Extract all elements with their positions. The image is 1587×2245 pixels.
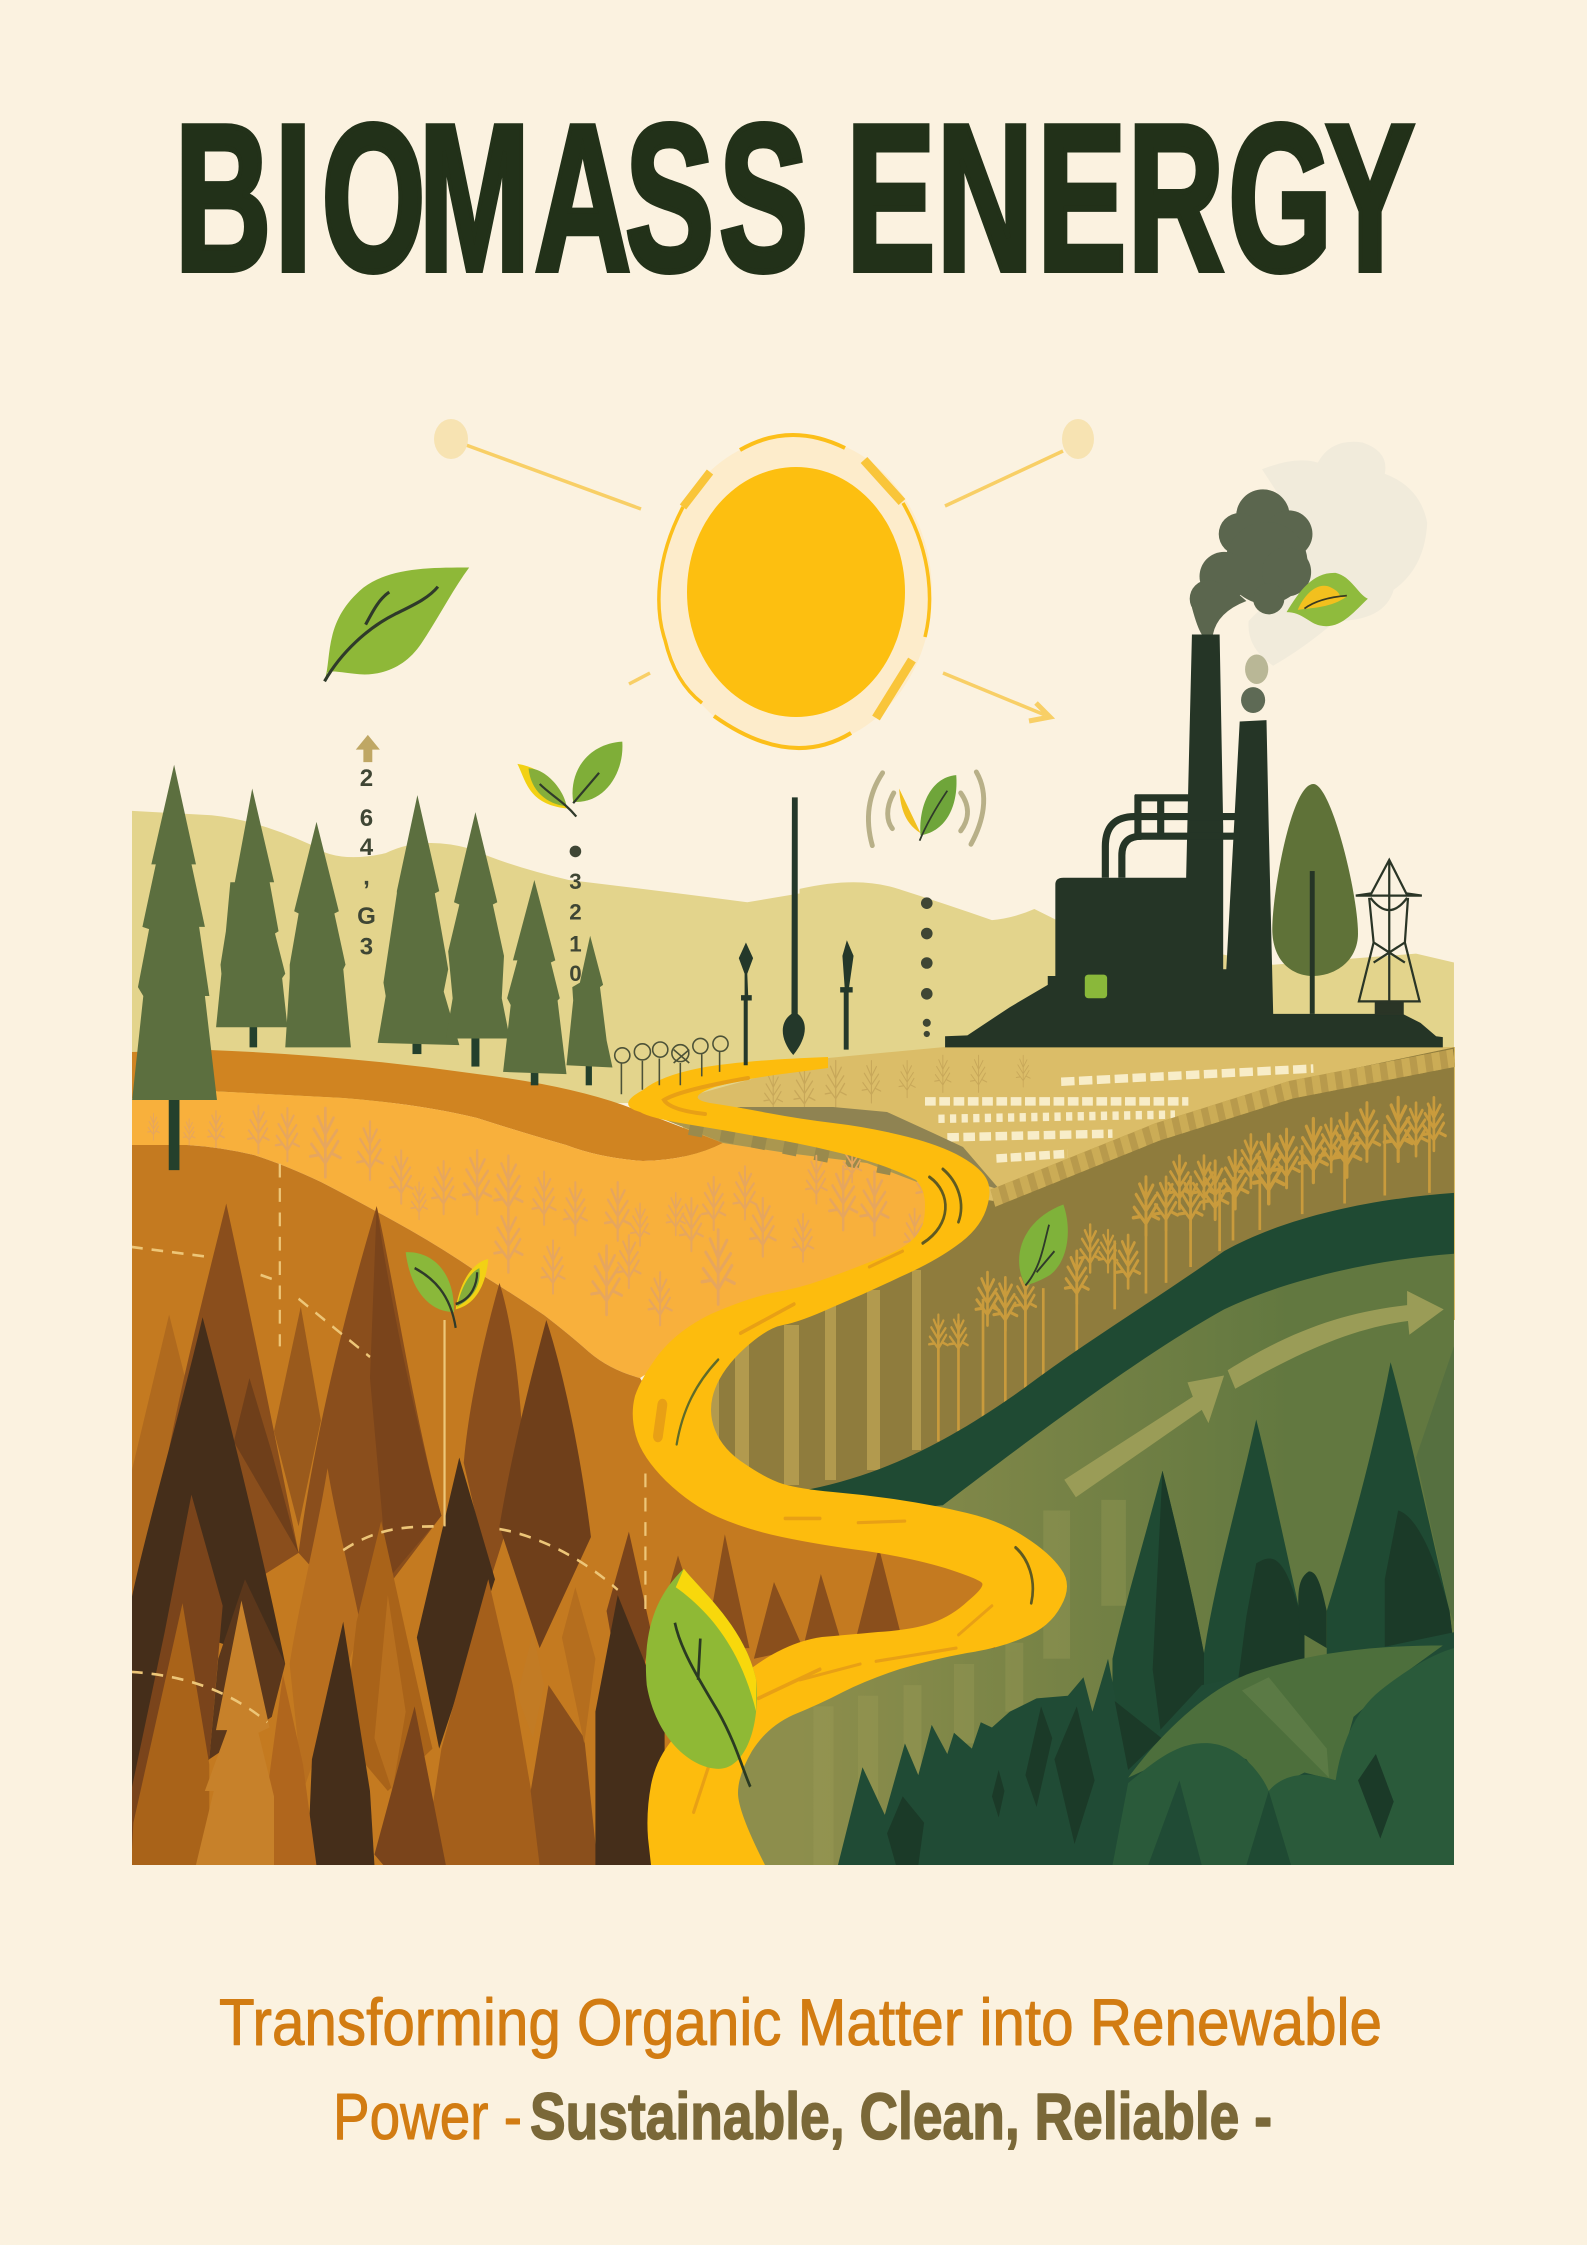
lower forest (838, 1632, 1454, 1865)
dots below signal (921, 897, 933, 1037)
dotted column: 1 (569, 931, 582, 956)
brown hillside (132, 1145, 1030, 1865)
light orange crop field (132, 1091, 960, 1378)
subtitle: Transforming Organic Matter into Renewable (219, 1985, 1382, 2059)
striped band (993, 1058, 1454, 1198)
hillside stripes (904, 1500, 1126, 1774)
row of pine trees (216, 788, 612, 1085)
icon: leaf in smoke (1287, 573, 1368, 626)
wheat stalks (929, 1098, 1445, 1442)
green hillside (733, 1219, 1454, 1865)
dotted column: 3 (569, 869, 582, 894)
numeric column with arrow (356, 735, 380, 961)
icon: large green leaf (325, 567, 469, 681)
field texture: crop rows (925, 1069, 1313, 1159)
sun (659, 435, 932, 748)
smoke (1190, 442, 1427, 713)
numeric column with arrow: 4 (360, 834, 374, 861)
biomass river (628, 1057, 1067, 1865)
right conifers (1112, 1346, 1454, 1770)
infographic poster (132, 121, 1455, 2150)
growth arrows (1064, 1291, 1444, 1497)
subtitle: Power - (333, 2079, 522, 2153)
dashed field lines (131, 1164, 645, 1722)
icon: leaf with signal waves (868, 772, 984, 846)
small flower doodles (615, 1036, 728, 1094)
numeric column with arrow: 2 (360, 765, 373, 792)
autumn forest (131, 1203, 995, 1865)
large pine tree (132, 765, 217, 1170)
numeric column with arrow: G (357, 903, 376, 930)
river marks (658, 1078, 1033, 1812)
icon: leaf on wheat field (1019, 1205, 1068, 1286)
title: BIOMASS ENERGY (175, 82, 1415, 315)
dotted column: 0 (569, 961, 582, 986)
hump behind river (737, 1107, 1000, 1190)
icon: large foreground leaf (646, 1569, 757, 1787)
orange ridge (132, 1050, 723, 1161)
crop plants (148, 1106, 940, 1325)
olive field (702, 1047, 1454, 1510)
numeric column with arrow: 3 (360, 934, 373, 961)
subtitle: Sustainable, Clean, Reliable - (530, 2079, 1272, 2153)
icon: sprout on hillside (406, 1252, 488, 1328)
lamp posts and probe (739, 797, 854, 1065)
sun ray end dots (434, 419, 1094, 459)
sun rays (466, 445, 1063, 721)
factory (945, 634, 1443, 1047)
dotted column (569, 846, 582, 986)
tree beside factory (1272, 784, 1358, 1014)
numeric column with arrow: 6 (360, 805, 373, 832)
pale smoke (1248, 442, 1427, 666)
subtitle (219, 1985, 1382, 2153)
vertical stripes (707, 1270, 921, 1485)
icon: sprout pair (517, 742, 622, 817)
faint plants on golden field (764, 1055, 1030, 1114)
power pylon (1356, 860, 1422, 1014)
dotted column: 2 (569, 899, 582, 924)
striped band under river (663, 1119, 935, 1182)
dark smoke (1190, 489, 1312, 634)
golden field (683, 1047, 1455, 1320)
distant hills (131, 811, 1454, 1103)
dark green river band (809, 1193, 1454, 1510)
numeric column with arrow: , (363, 863, 370, 890)
panel: landscape illustration (131, 634, 1455, 1865)
